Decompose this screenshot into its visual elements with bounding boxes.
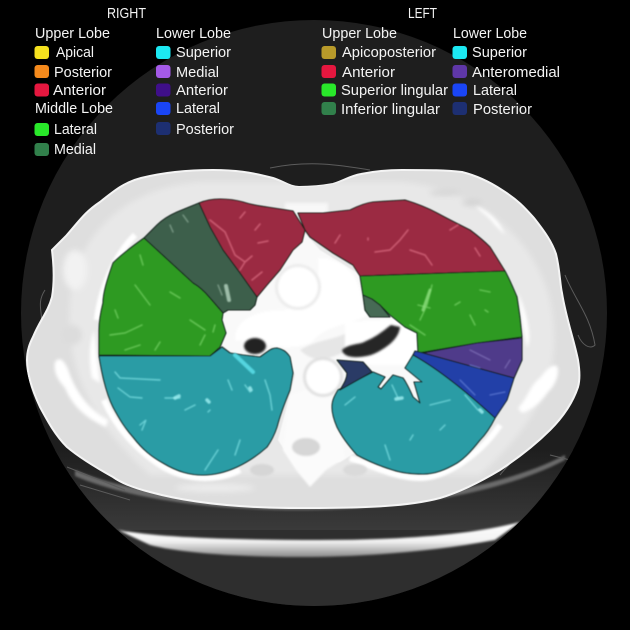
heading: LEFT: LEFT: [408, 6, 437, 22]
left upper lobe inferior lingular: [363, 295, 390, 317]
body cross-section: [27, 170, 580, 508]
left upper lobe legend: Apicoposterior: [342, 45, 436, 61]
right upper lobe legend: Upper Lobe: [35, 26, 110, 42]
left lower lobe legend: Anteromedial: [472, 65, 560, 81]
left upper lobe anterior: [298, 200, 505, 276]
mediastinum and spine: [222, 225, 425, 487]
pleural rim around lungs: [97, 235, 500, 478]
left upper lobe legend: Anterior: [342, 65, 395, 81]
left upper lobe legend: [322, 26, 448, 118]
right middle lobe medial: [144, 203, 257, 313]
scanner table: [75, 455, 565, 557]
right lower lobe legend: [156, 26, 234, 138]
vessels in red segments: [210, 212, 480, 280]
right middle lobe legend: Lateral: [54, 122, 97, 138]
right upper lobe legend: Posterior: [54, 65, 112, 81]
left lower lobe legend: Lateral: [473, 83, 517, 99]
vertebra: [250, 438, 366, 486]
left lower lobe anteromedial: [423, 338, 522, 378]
heart and great vessels: [276, 264, 344, 398]
right lower lobe legend: Superior: [176, 45, 231, 61]
right upper lobe legend: Anterior: [53, 83, 106, 99]
right lower lobe legend: Lower Lobe: [156, 26, 231, 42]
right lower lobe superior: [99, 347, 293, 475]
ribs: [55, 203, 558, 427]
lung segments: [99, 199, 522, 475]
right middle lobe legend: Middle Lobe: [35, 101, 113, 117]
right lower lobe legend: Posterior: [176, 122, 234, 138]
right lower lobe legend: Anterior: [176, 83, 228, 99]
vessels in teal segments: [115, 355, 482, 470]
right upper lobe legend: [34, 26, 112, 99]
legend: left lung: [322, 6, 560, 118]
left upper lobe superior lingular: [360, 271, 522, 353]
right upper lobe legend: Apical: [56, 45, 94, 61]
vessels in green segments: [110, 255, 490, 350]
right lower lobe legend: Lateral: [176, 101, 220, 117]
left lower lobe legend: [452, 26, 560, 118]
right middle lobe legend: Medial: [54, 142, 96, 158]
fine skin fold lines: [40, 164, 595, 500]
vessels in purple and blue segments: [460, 350, 510, 395]
right lower lobe legend: Medial: [176, 65, 219, 81]
left upper lobe legend: Inferior lingular: [341, 102, 440, 118]
left lower lobe superior: [332, 355, 495, 474]
left lower lobe legend: Superior: [472, 45, 527, 61]
left lower lobe legend: Lower Lobe: [453, 26, 527, 42]
chest wall soft tissue shading: [62, 182, 554, 492]
left upper lobe legend: Superior lingular: [341, 83, 448, 99]
legend: right lung: [34, 6, 234, 158]
lung vessels: [110, 212, 510, 470]
left lower lobe legend: Posterior: [473, 102, 532, 118]
right middle lobe lateral: [99, 238, 226, 356]
airways: [244, 325, 400, 357]
vessels in dark green segment: [170, 215, 229, 300]
left lower lobe posterior: [337, 360, 372, 390]
right middle lobe legend: [34, 101, 113, 158]
left lower lobe lateral: [413, 351, 514, 418]
left upper lobe legend: Upper Lobe: [322, 26, 397, 42]
heading: RIGHT: RIGHT: [107, 6, 146, 22]
right upper lobe anterior: [199, 199, 305, 297]
